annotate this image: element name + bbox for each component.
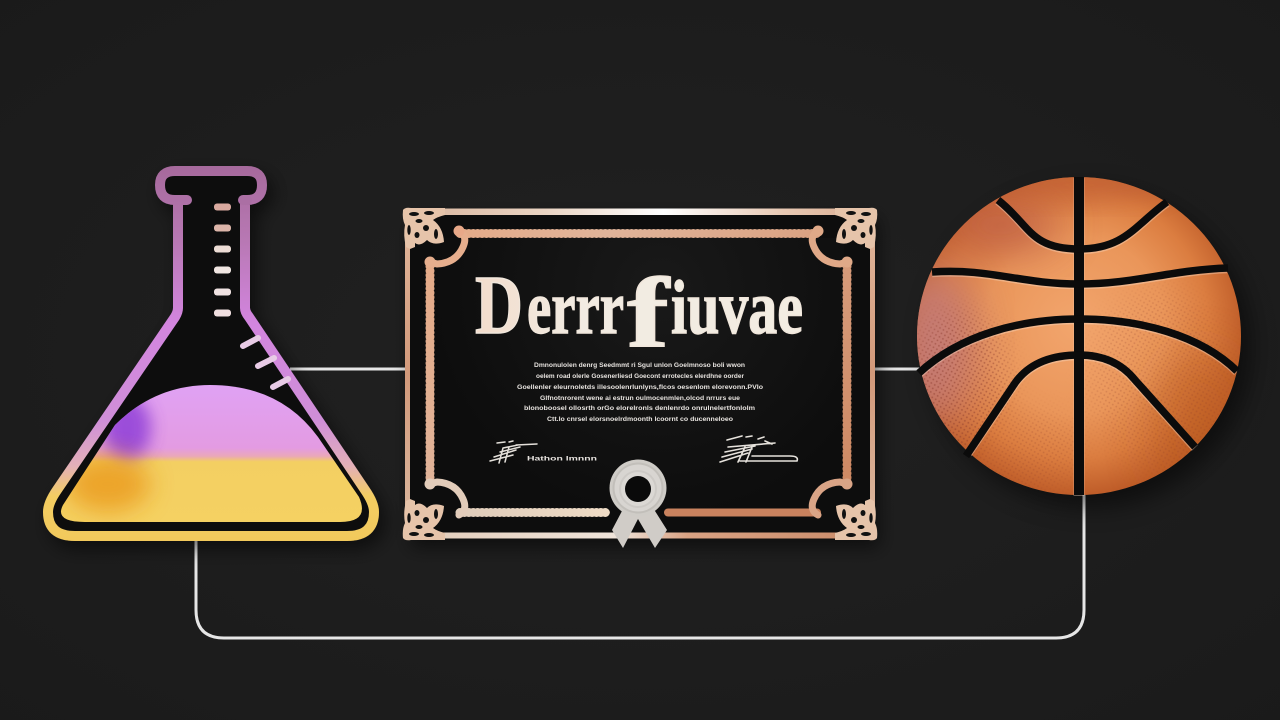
ball seams [919,177,1237,495]
left signature: Hathon lmnnn [527,456,597,462]
infographic: flask, certificate and basketball connected by lines [43,166,1252,640]
right lip hook [243,195,247,205]
certificate body text: Goellenler eleurnoletds illesoolenrlunlyns,flcos oesenlom elorevonn.PVIo [517,384,763,391]
flask lip opening [166,177,256,206]
certificate body text: oelem road olerle Gosenerliesd Goecont errotecles elerdhne oorder [536,373,744,380]
connector: flask to certificate [290,368,408,370]
connector: certificate to basketball [873,368,920,370]
flask outline [48,171,374,536]
ball drop shadow [928,189,1252,507]
seam highlights [919,178,1237,496]
certificate title: iuvae [671,266,803,350]
left signature [490,441,597,463]
liquid [60,385,362,522]
scalloped inner border [430,234,847,512]
rosette [610,460,666,516]
panel: certificate [403,208,877,548]
certificate inner panel [434,238,844,508]
corner ornaments [403,208,877,540]
ribbon tails [612,511,667,548]
icon: conical flask [48,171,375,536]
certificate body text: Glfnotnrorent wene ai estrun oulmocenmlen,olcod nrrurs eue [540,395,740,402]
outer frame [405,208,875,539]
right signature [720,436,797,462]
certificate background [405,210,873,539]
certificate body text: blonoboosel ollosrth orGo elorelronls denlenrdo onrulnelertfonlolm [524,405,755,412]
certificate title: errr [527,266,624,350]
ball body [917,177,1241,495]
certificate body text [517,362,763,423]
certificate title: D [475,259,523,352]
neck graduation marks [214,204,231,316]
corner arcs [424,226,852,515]
certificate title: f [627,257,671,368]
connector: flask base looping under to basketball [196,492,1084,638]
certificate body text: Ctt.lo cnrsel elorsnoelrdmoonth lcoornt co ducenneloeo [547,416,733,423]
seal with ribbon [610,460,667,548]
certificate body text: Dmnonulolen denrg Seedmmt ri Sgul unlon Goelmnoso boli wwon [534,362,745,369]
icon: basketball [895,169,1252,510]
body graduation marks [243,338,288,387]
